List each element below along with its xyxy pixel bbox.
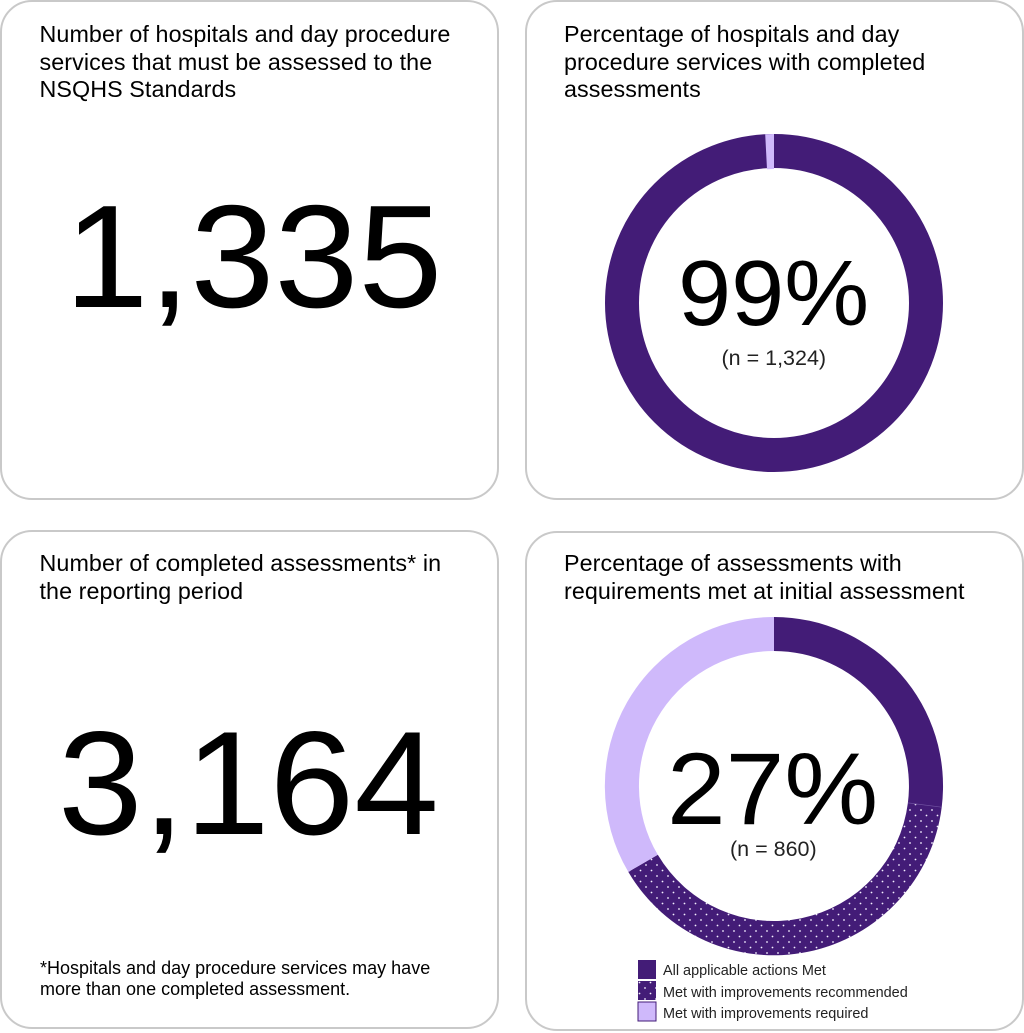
heading: hospitals to be assessed: Number of hospitals and day procedure	[40, 21, 450, 47]
footnote: more than one completed assessment.	[40, 979, 350, 999]
footnote: *Hospitals and day procedure services may have	[40, 958, 430, 978]
heading: requirements met	[564, 550, 965, 604]
heading: completed assessments count: Number of completed assessments* in	[40, 550, 441, 576]
heading: hospitals to be assessed	[40, 21, 450, 102]
heading: completed assessment percentage: assessments	[564, 76, 701, 102]
panel: completed assessments count	[0, 530, 499, 1029]
footnote	[40, 958, 430, 999]
heading: hospitals to be assessed: services that must be assessed to the	[40, 48, 432, 74]
heading: requirements met: Percentage of assessments with	[564, 550, 902, 576]
panel: requirements met	[525, 531, 1024, 1031]
heading: completed assessment percentage	[564, 21, 925, 102]
legend	[638, 960, 908, 1022]
heading: completed assessments count	[40, 550, 441, 604]
legend swatches	[638, 960, 656, 1022]
legend label: improvements required: Met with improvements required	[663, 1006, 868, 1022]
heading: completed assessments count: the reporting period	[40, 578, 243, 604]
heading: completed assessment percentage: procedure services with completed	[564, 48, 925, 74]
number: 3,164: 3,164	[58, 701, 439, 866]
heading: completed assessment percentage: Percentage of hospitals and day	[564, 21, 899, 47]
value: 99%: 99%	[678, 243, 869, 346]
heading: requirements met: requirements met at initial assessment	[564, 578, 965, 604]
panel: hospitals to be assessed	[0, 0, 499, 500]
value: 27%: 27%	[667, 732, 878, 846]
count: n = 1,324: (n = 1,324)	[722, 346, 826, 370]
legend label: all actions met: All applicable actions Met	[663, 963, 826, 979]
legend label: improvements recommended: Met with improvements recommended	[663, 985, 908, 1001]
number: 1,335: 1,335	[64, 174, 442, 338]
heading: hospitals to be assessed: NSQHS Standards	[40, 76, 236, 102]
panel: completed assessment percentage	[525, 0, 1024, 500]
count: n = 860: (n = 860)	[730, 836, 817, 860]
